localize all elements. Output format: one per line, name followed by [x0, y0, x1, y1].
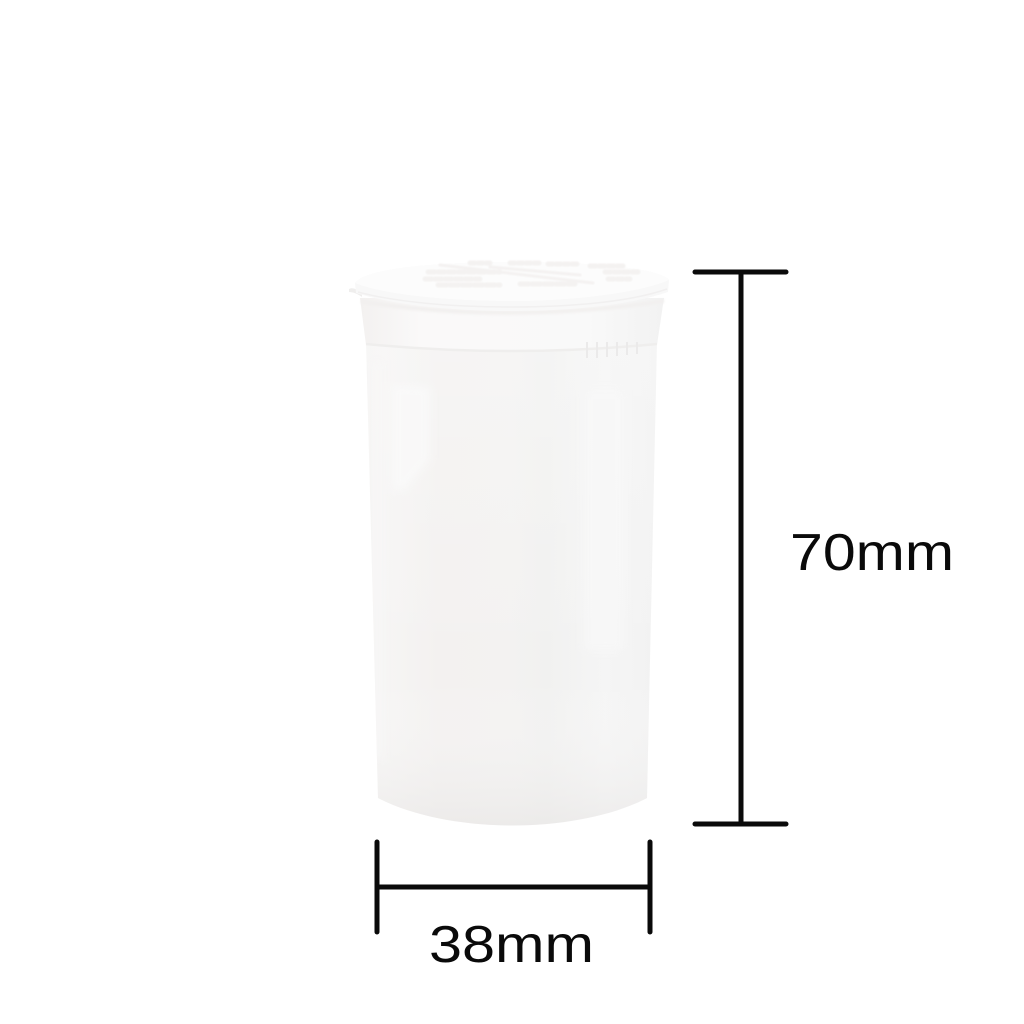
container lid	[349, 262, 669, 311]
width dimension marker	[377, 842, 650, 932]
lid embossed pattern	[425, 263, 640, 285]
width label: 38mm	[429, 916, 594, 974]
infographic canvas	[349, 260, 950, 962]
container body	[366, 340, 657, 826]
height label: 70mm	[790, 524, 954, 582]
height dimension marker	[695, 272, 786, 824]
icon: white pop-top container	[349, 262, 669, 826]
body highlights	[372, 360, 624, 760]
container collar	[360, 298, 664, 358]
